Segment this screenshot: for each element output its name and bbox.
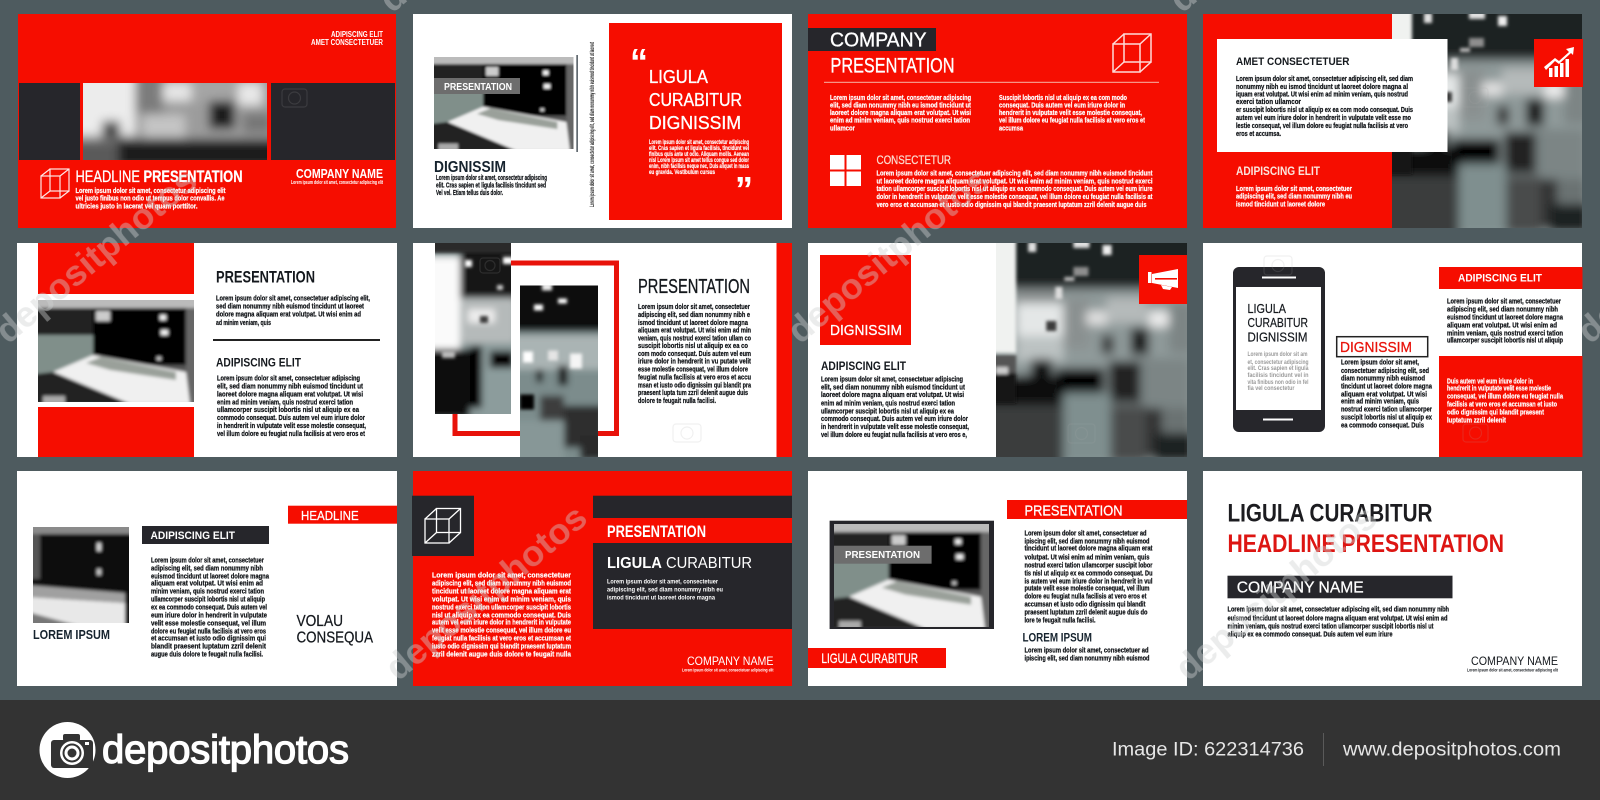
body text: ismod tincidunt ut laoreet dolore magna [638, 318, 749, 327]
phone screen text: et, consectetur adipiscing [1248, 359, 1309, 366]
body text: iusto odio dignissim qui blandit praesent luptatum [432, 642, 571, 650]
body text: nonummy nibh eu ismod tincidunt ut laoreet dolore magna al [1236, 82, 1408, 91]
panel: red and dark slide: ismod tincidunt ut laoreet dolore magna [607, 594, 715, 602]
body column 2: Suscipit lobortis nisl ut aliquip ex ea com modo [999, 93, 1127, 102]
body text: suscipit lobortis nisl ut aliquip ex [1341, 412, 1432, 422]
body text [151, 556, 270, 658]
dark band left [19, 83, 80, 160]
red quote panel [609, 23, 782, 220]
panel: red and dark slide: adipiscing elit, sed diam nonummy nibh eu [607, 586, 723, 594]
body text: Lorem ipsum dolor sit amet, consectetuer adipiscing [821, 374, 963, 384]
body text: praesent lupta tum zzril delenit augue duis [638, 388, 748, 397]
body text: nostrud exerci tation ullamcorper suscipit lobortis [432, 602, 571, 612]
body text: Lorem ipsum dolor sit amet, consectetur adipiscing [436, 173, 547, 182]
body text: autem vel eum iriure dolor in hendrerit in vulputate [432, 618, 571, 626]
body text: zzril delenit augue duis dolore te feugait nulla [432, 650, 572, 658]
heading: PRESENTATION [607, 523, 706, 541]
body text: et accumsan et iusto odio dignissim qui [151, 634, 266, 642]
body text: Lorem ipsum dolor sit amet, consectetuer [638, 302, 750, 311]
body text: ex ea commodo consequat. Duis autem vel [151, 602, 267, 612]
panel: quote slide: PRESENTATION [444, 82, 512, 93]
panel: mobile phone slide: DIGNISSIM [1340, 339, 1412, 356]
red title block [820, 255, 911, 345]
body text: sed diam nonummy nibh euismod tincidunt ut laoreet [216, 302, 364, 310]
body text: euismod tincidunt ut laoreet dolore magna [151, 572, 270, 580]
body text: Lorem ipsum dolor sit amet, consectetuer ad [1024, 646, 1148, 654]
body text: eum iriure dolor in hendrerit in vulputate [151, 610, 267, 620]
body text: Lorem ipsum dolor sit amet, consectetuer [432, 570, 571, 580]
body text [216, 294, 370, 327]
body text: esse molestie consequat, vel illum dolore [638, 364, 748, 374]
body text: blandit praesent luptatum zzril delenit [151, 642, 267, 650]
heading: DIGNISSIM [434, 159, 506, 176]
title: COMPANY [830, 30, 926, 52]
website: www.depositphotos.com [1342, 740, 1561, 760]
heading: PRESENTATION [216, 268, 315, 286]
body text [1341, 358, 1433, 430]
body text: com modo consequat. Duis autem vel eum [638, 349, 751, 358]
icon: megaphone [1139, 255, 1187, 304]
body text: eros et accumsa. [1236, 129, 1281, 138]
subheading: CONSECTETUR [876, 153, 951, 167]
rule [824, 82, 1159, 83]
dark icon square [412, 496, 474, 556]
body text: minim veniam, quis nostrud exerci tation ullamcorper suscipit lobortis nisl ut [1228, 622, 1434, 630]
photo label [834, 546, 932, 564]
panel: mobile phone slide: facilisis at vero eros et accumsan et iusto [1447, 400, 1557, 408]
phone screen text: vita finibus non odio in fel [1248, 379, 1309, 386]
body text [821, 374, 969, 439]
body column 1 [830, 93, 971, 132]
body text: in hendrerit in vulputate velit esse molestie consequat, [821, 422, 969, 431]
body text: tincidunt ut laoreet dolore magna [1341, 382, 1433, 390]
red ribbon bottom [808, 648, 946, 668]
panel: closing title slide: Lorem ipsum dolor sit amet, consectetuer adipiscing elit [1467, 668, 1558, 672]
heading: AMET CONSECTETUER [1236, 56, 1350, 68]
body column 2: hendrerit in vulputate velit esse molestie consequat, [999, 108, 1142, 117]
panel: framed photo ribbon slide: PRESENTATION [845, 549, 920, 561]
panel: headline presentation slide: Lorem ipsum dolor sit amet, consectetur adipiscing elit [291, 180, 383, 186]
phone screen title: LIGULA [1248, 302, 1287, 316]
photo left [425, 233, 525, 433]
body text: ultricies justo in lacerat vel quam porttitor. [76, 202, 198, 210]
panel: amet consectetuer slide [1203, 0, 1600, 264]
body text [1447, 296, 1564, 344]
panel: mobile phone slide: consequat, vel illum dolore eu feugiat nulla [1447, 392, 1564, 400]
body text: nostrud exerci tation ullamcorper suscipit lobor [1024, 560, 1153, 570]
panel: red and dark slide: Lorem ipsum dolor sit amet, consectetuer [607, 578, 718, 586]
body text: lore te feugait nulla facilisi. [1024, 616, 1096, 624]
phone screen title: DIGNISSIM [1248, 330, 1308, 344]
photo [1362, 0, 1600, 264]
photo [966, 213, 1217, 493]
quote body: nisi Lorem ipsum sit amet tellus congue sed dolor [649, 158, 749, 164]
panel: mobile phone slide: hendrerit in vulputate velit esse molestie [1447, 384, 1551, 392]
phone screen text: facilisis tincidunt vel in [1248, 372, 1309, 379]
body text: aliquam erat volutpat. Ut wisi enim ad [1447, 320, 1557, 330]
photo label [434, 78, 520, 94]
body text: tincidunt ut laoreet dolore magna aliquam erat [432, 586, 572, 596]
body text: nostrud exerci tation ullamcorper [1341, 404, 1432, 414]
body text: commodo consequat. Duis autem vel eum iriure dolor [821, 414, 968, 423]
body text: euismod tincidunt ut laoreet dolore magna aliquam erat volutpat. Ut wisi enim ad [1228, 614, 1448, 622]
body text: commodo consequat. Duis autem vel eum iriure dolor [217, 413, 365, 422]
icon: phone [1233, 267, 1325, 432]
subheading: ADIPISCING ELIT [216, 356, 302, 370]
body text: tis nisl ut aliquip ex ea commodo consequat. Du [1024, 568, 1152, 578]
body column 2: consequat. Duis autem vel eum iriure dolor in [999, 100, 1125, 110]
quote body [649, 140, 749, 176]
body text: ullamcorper suscipit lobortis nisl ut aliquip ex ea [821, 406, 955, 416]
body text: Lorem ipsum dolor sit amet, consectetuer [151, 556, 264, 564]
white text card [1217, 39, 1448, 152]
icon: cube [41, 169, 69, 198]
body text: augue duis dolore te feugait nulla facilisi. [151, 650, 263, 658]
body text [76, 186, 226, 210]
body column 1: elit, sed diam nonummy nibh eu ismod tincidunt ut [830, 100, 971, 110]
quote title: CURABITUR [649, 90, 742, 110]
panel: headline ribbon slide [17, 471, 397, 686]
body text: enim ad minim veniam, quis [1341, 396, 1419, 406]
divider line [576, 55, 578, 152]
body text: enim ad minim veniam, quis nostrud exerci tation [821, 398, 955, 408]
phone screen text: Lorem ipsum dolor sit am [1248, 351, 1308, 358]
panel: closing title slide: HEADLINE PRESENTATION [1228, 530, 1504, 558]
panel: headline presentation slide [18, 14, 396, 228]
framed photo [830, 521, 994, 629]
body text: Lorem ipsum dolor sit amet, consectetuer [1236, 184, 1352, 193]
side title: CONSEQUA [296, 630, 374, 647]
panel: red and dark slide: Lorem ipsum dolor sit amet, consectetuer adipiscing elit [682, 668, 774, 672]
phone screen title: CURABITUR [1248, 316, 1308, 330]
body text: iquam erat volutpat. Ut wisi enim ad minim veniam, quis nostrud [1236, 90, 1408, 98]
body text: in hendrerit in vulputate velit esse molestie consequat, [217, 421, 366, 430]
dark bar [1228, 576, 1452, 598]
body text: dolore magna aliquam erat volutpat. Ut wisi enim ad [216, 310, 361, 318]
heading: PRESENTATION [638, 276, 750, 298]
body text: Lorem ipsum dolor sit amet, consectetuer ad [1024, 528, 1146, 538]
body text: Lorem ipsum dolor sit amet, consectetuer [1447, 296, 1561, 306]
photo [425, 48, 586, 161]
quote title [649, 67, 742, 133]
panel: mobile phone slide: luptatum zzril delenit [1447, 416, 1506, 424]
watermarks: depositphotos [779, 159, 997, 351]
body text: enim ad minim veniam, quis nostrud exerci tation [217, 398, 353, 406]
body text: consectetuer adipiscing elit, sed [1341, 366, 1429, 375]
image id: Image ID: 622314736 [1112, 740, 1304, 760]
dark title bar [808, 28, 936, 51]
body text: feugiat nulla facilisis at vero eros et accu [638, 372, 751, 382]
body text: msan et iusto odio dignissim qui blandit pra [638, 380, 752, 390]
body text: vero eros et accumsan et iusto odio dignissim qui blandit praesent luptatum zzril delenit augue duis [876, 200, 1146, 209]
body text: praesent luptatum zzril delenit augue duis do [1024, 608, 1148, 616]
icon: growth chart [1534, 39, 1583, 87]
company name: COMPANY NAME [687, 656, 774, 668]
body column 2 [999, 93, 1145, 132]
body text: Lorem ipsum dolor sit amet, consectetur adipiscing elit [76, 186, 226, 195]
body text: dolore eu feugiat nulla facilisis at vero eros [151, 626, 266, 636]
dark band right [271, 83, 395, 160]
watermark camera stamps [282, 88, 1488, 443]
body text: adipiscing elit, sed diam nonummy nibh [151, 564, 263, 572]
body text: is autem vel eum iriure dolor in hendrerit in vul [1024, 576, 1152, 586]
logo wordmark: depositphotos [102, 728, 349, 772]
body text: volutpat. Ut wisi enim ad minim veniam, quis [432, 594, 571, 604]
company name: COMPANY NAME [296, 166, 383, 181]
panel: mobile phone slide: odio dignissim qui blandit praesent [1447, 408, 1544, 416]
body text: velit esse molestie consequat, vel illum dolore eu [432, 626, 571, 634]
body text: lestie consequat, vel illum dolore eu feugiat nulla facilisis at vero [1236, 121, 1408, 130]
watermarks: depositphotos [377, 496, 595, 688]
photo [28, 290, 208, 415]
panel: framed photos slide [413, 233, 792, 476]
body text: laoreet dolore magna aliquam erat volutpat. Ut wisi [217, 390, 363, 398]
panel: red and dark slide: LIGULA CURABITUR [607, 555, 752, 572]
body column 1: Lorem ipsum dolor sit amet, consectetuer adipiscing [830, 93, 971, 102]
quote body: finibus quis ante ut odio. Aliquam mollis. Aenean [649, 152, 749, 158]
body text: putate velit esse molestie consequat, vel illum [1024, 584, 1150, 592]
body text [638, 302, 752, 405]
phone screen title [1248, 302, 1308, 344]
body text: ismod tincidunt ut laoreet dolore [1236, 200, 1325, 208]
body text: autem vel eum iriure dolor in hendrerit in vulputate velit esse mo [1236, 113, 1411, 122]
body text [1236, 74, 1413, 138]
body text: adipiscing elit, sed diam nonummy nibh e [638, 310, 750, 319]
footer bar [0, 700, 1600, 800]
photo [28, 522, 138, 632]
body column 2: vel illum dolore eu feugiat nulla facilisis at vero eros et [999, 116, 1145, 124]
body text: adipiscing elit, sed diam nonummy nibh euismod [432, 578, 571, 588]
body text [432, 570, 572, 658]
body text: vel justo finibus non odio ut tempus dolor convallis. Ae [76, 194, 225, 202]
red right edge [776, 243, 792, 457]
quote title: LIGULA [649, 67, 708, 87]
icon: four squares [830, 155, 861, 186]
caption: LOREM IPSUM [33, 628, 110, 642]
rule [213, 339, 380, 341]
red frame [455, 263, 616, 434]
body text: er suscipit lobortis nisl ut aliquip ex ea com modo consequat. Duis [1236, 105, 1413, 114]
panel: dignissim photo slide [808, 213, 1217, 493]
body text: minim veniam, quis nostrud exerci tation [1447, 328, 1563, 338]
quote title: DIGNISSIM [649, 113, 741, 133]
body text: elit. Cras sapien et ligula facilisis tincidunt sed [436, 180, 546, 190]
quote body: eu gravida. Vestibulum cursus [649, 170, 715, 176]
body text: feugiat nulla facilisis at vero eros et accumsan et [432, 634, 572, 642]
body text: ullamcorper suscipit lobortis nisl ut aliquip [1447, 336, 1563, 344]
body text: aliquip ex ea commodo consequat. Duis autem vel eum iriure [1228, 630, 1392, 638]
panel: mobile phone slide [1203, 243, 1582, 457]
icon: cube [1113, 34, 1151, 72]
body text: ullamcorper suscipit lobortis nisl ut aliquip ex ea [217, 405, 360, 414]
body column 1: laoreet dolore magna aliquam erat volutpat. Ut wisi [830, 108, 971, 117]
body text: iriure dolor in hendrerit in vu putate velit [638, 356, 751, 366]
panel: mobile phone slide: Duis autem vel eum iriure dolor in [1447, 376, 1533, 386]
side title [296, 613, 374, 647]
panel: closing title slide [1203, 471, 1582, 686]
body text: ad minim veniam, quis [216, 318, 271, 327]
body text: adipiscing elit, sed diam nonummy nibh [1447, 304, 1558, 314]
body column 1: enim ad minim veniam, quis nostrud exerci tation [830, 116, 970, 124]
body text: tincidunt ut laoreet dolore magna aliquam erat [1024, 544, 1153, 552]
body text: suscipit lobortis nisl ut aliquip ex ea co [638, 341, 748, 350]
body text [1024, 646, 1150, 662]
body text: laoreet dolore magna aliquam erat volutpat. Ut wisi [821, 390, 964, 399]
body text: exerci tation ullamcor [1236, 97, 1301, 106]
panel: headline ribbon slide: ADIPISCING ELIT [150, 530, 235, 542]
panel: mobile phone slide: ADIPISCING ELIT [1458, 272, 1542, 284]
phone screen text [1248, 351, 1309, 392]
panel: company presentation slide [808, 14, 1187, 228]
red block bottom [38, 407, 194, 457]
body text: ipiscing elit, sed diam nonummy nibh euismod [1024, 536, 1150, 546]
quote mark close: ” [735, 169, 753, 210]
watermarks: depositphotos [1167, 496, 1385, 688]
body text [1024, 528, 1153, 624]
body text: Lorem ipsum dolor sit amet, consectetuer adipiscing elit, sed diam nonummy nibh [1228, 604, 1449, 614]
top right caption [311, 30, 383, 47]
body text: nisl ut aliquip ex ea commodo consequat. Duis [432, 610, 571, 620]
title: LIGULA CURABITUR [1228, 500, 1432, 528]
body text: diam nonummy nibh euismod [1341, 374, 1425, 382]
phone screen text: elit. Cras sapien et ligula [1248, 365, 1309, 372]
panel: framed photo ribbon slide: PRESENTATION [1024, 503, 1122, 520]
body text: aliquam erat volutpat. Ut wisi enim ad min [638, 326, 751, 334]
panel: framed photo ribbon slide [808, 471, 1187, 686]
body text: minim veniam, quis nostrud exerci tation [151, 586, 264, 596]
red ribbon [1007, 500, 1187, 519]
quote body: Lorem ipsum dolor sit amet, consectetur adipiscing [649, 140, 749, 146]
side title: VOLAU [296, 613, 343, 630]
body text [436, 173, 547, 197]
body text: Lorem ipsum dolor sit amet, consectetuer adipiscing [217, 374, 360, 382]
quote body: elit. Cras sapien et ligula facilisis, tincidunt vel [649, 146, 749, 152]
body text [876, 168, 1153, 209]
body text: elit, sed diam nonummy nibh euismod tincidunt ut [821, 382, 965, 392]
blurred photo band [73, 73, 283, 173]
subheading: ADIPISCING ELIT [1236, 166, 1320, 178]
body text: Lorem ipsum dolor sit amet, [1341, 358, 1419, 366]
body column 1: ullamcor [830, 124, 855, 132]
panel: headline ribbon slide: HEADLINE [301, 508, 359, 523]
body text [217, 374, 366, 438]
body text: veniam, quis nostrud exerci tation ullam co [638, 334, 751, 342]
panel: dignissim photo slide: DIGNISSIM [830, 322, 902, 339]
photo right [510, 276, 610, 476]
body text: ipiscing elit, sed diam nonummy nibh euismod [1024, 654, 1150, 662]
panel: company presentation slide: PRESENTATION [830, 54, 954, 78]
body text: euismod tincidunt ut laoreet dolore magna [1447, 312, 1564, 322]
quote mark open: “ [630, 41, 648, 82]
red text box [1439, 356, 1582, 457]
panel: closing title slide: COMPANY NAME [1237, 580, 1364, 597]
body text: ullamcorper suscipit lobortis nisl ut aliquip [151, 594, 265, 604]
body text: vel illum dolore eu feugiat nulla facilisis at vero eros et [217, 429, 365, 438]
company name: COMPANY NAME [1471, 656, 1558, 668]
subheading: ADIPISCING ELIT [821, 359, 907, 373]
body text: vel illum dolore eu feugiat nulla facilisis at vero eros e, [821, 430, 967, 439]
red block top [38, 243, 194, 294]
body column 2: accumsa [999, 124, 1024, 132]
panel: quote slide [413, 14, 792, 228]
body text: aliquam erat volutpat. Ut wisi enim ad [151, 578, 263, 588]
body text: accumsan et iusto odio dignissim qui blandit [1024, 600, 1146, 608]
body text: Lorem ipsum dolor sit amet, consectetuer adipiscing elit, [216, 294, 370, 302]
red ribbon [288, 506, 397, 524]
dark heading bar [142, 526, 269, 544]
top right caption: ADIPISCING ELIT [331, 30, 383, 39]
body text: tation ullamcorper suscipit lobortis nisl ut aliquip ex ea commodo consequat. Duis autem vel eum iriure [876, 184, 1152, 193]
body text: dolore eu feugiat nulla facilisis at vero eros et [1024, 592, 1147, 600]
body text [1228, 604, 1449, 638]
body text: adipiscing elit, sed diam nonummy nibh eu [1236, 192, 1352, 200]
body text: ut laoreet dolore magna aliquam erat volutpat. Ut wisi enim ad minim veniam, quis nostrud exerci [876, 176, 1152, 186]
body text: Lorem ipsum dolor sit amet, consectetuer adipiscing elit, sed diam [1236, 74, 1413, 83]
body text: elit, sed diam nonummy nibh euismod tincidunt ut [217, 382, 364, 390]
dark box [593, 543, 792, 629]
quote body: enim, nibh facilisis neque nec, Duis aliquet in mass [649, 164, 749, 170]
subheading: LOREM IPSUM [1022, 633, 1092, 645]
body text: dolore te feugait nulla facilisi. [638, 396, 716, 405]
panel: framed photo ribbon slide: LIGULA CURABITUR [821, 650, 918, 666]
icon: cube [425, 508, 460, 543]
body text: aliquam erat volutpat. Ut wisi [1341, 390, 1427, 398]
body text: dolor in hendrerit in vulputate velit esse molestie consequat, vel illum dolore eu feugiat nulla facilisis at [876, 192, 1153, 201]
panel: red and dark slide [412, 471, 792, 686]
heading: HEADLINE PRESENTATION [76, 168, 242, 186]
panel: presentation split slide [17, 243, 397, 457]
body text: ea commodo consequat. Duis [1341, 420, 1424, 430]
body text: volutpat. Ut wisi enim ad minim veniam, quis [1024, 552, 1150, 562]
body text: velit esse molestie consequat, vel illum [151, 618, 266, 628]
icon: camera logo [40, 722, 96, 778]
red ribbon [1439, 267, 1582, 289]
top right caption: AMET CONSECTETUER [311, 38, 383, 47]
dark bar [593, 496, 792, 518]
body text [1236, 184, 1352, 208]
body text: Lorem ipsum dolor sit amet, consectetuer adipiscing elit, sed diam nonummy nibh euismod tincidunt [876, 168, 1153, 178]
phone screen text: fia vel consectetur [1248, 385, 1295, 392]
body text: Vel vel. Etiam tellus duis dolor. [436, 188, 503, 197]
outlined label [1337, 337, 1428, 357]
